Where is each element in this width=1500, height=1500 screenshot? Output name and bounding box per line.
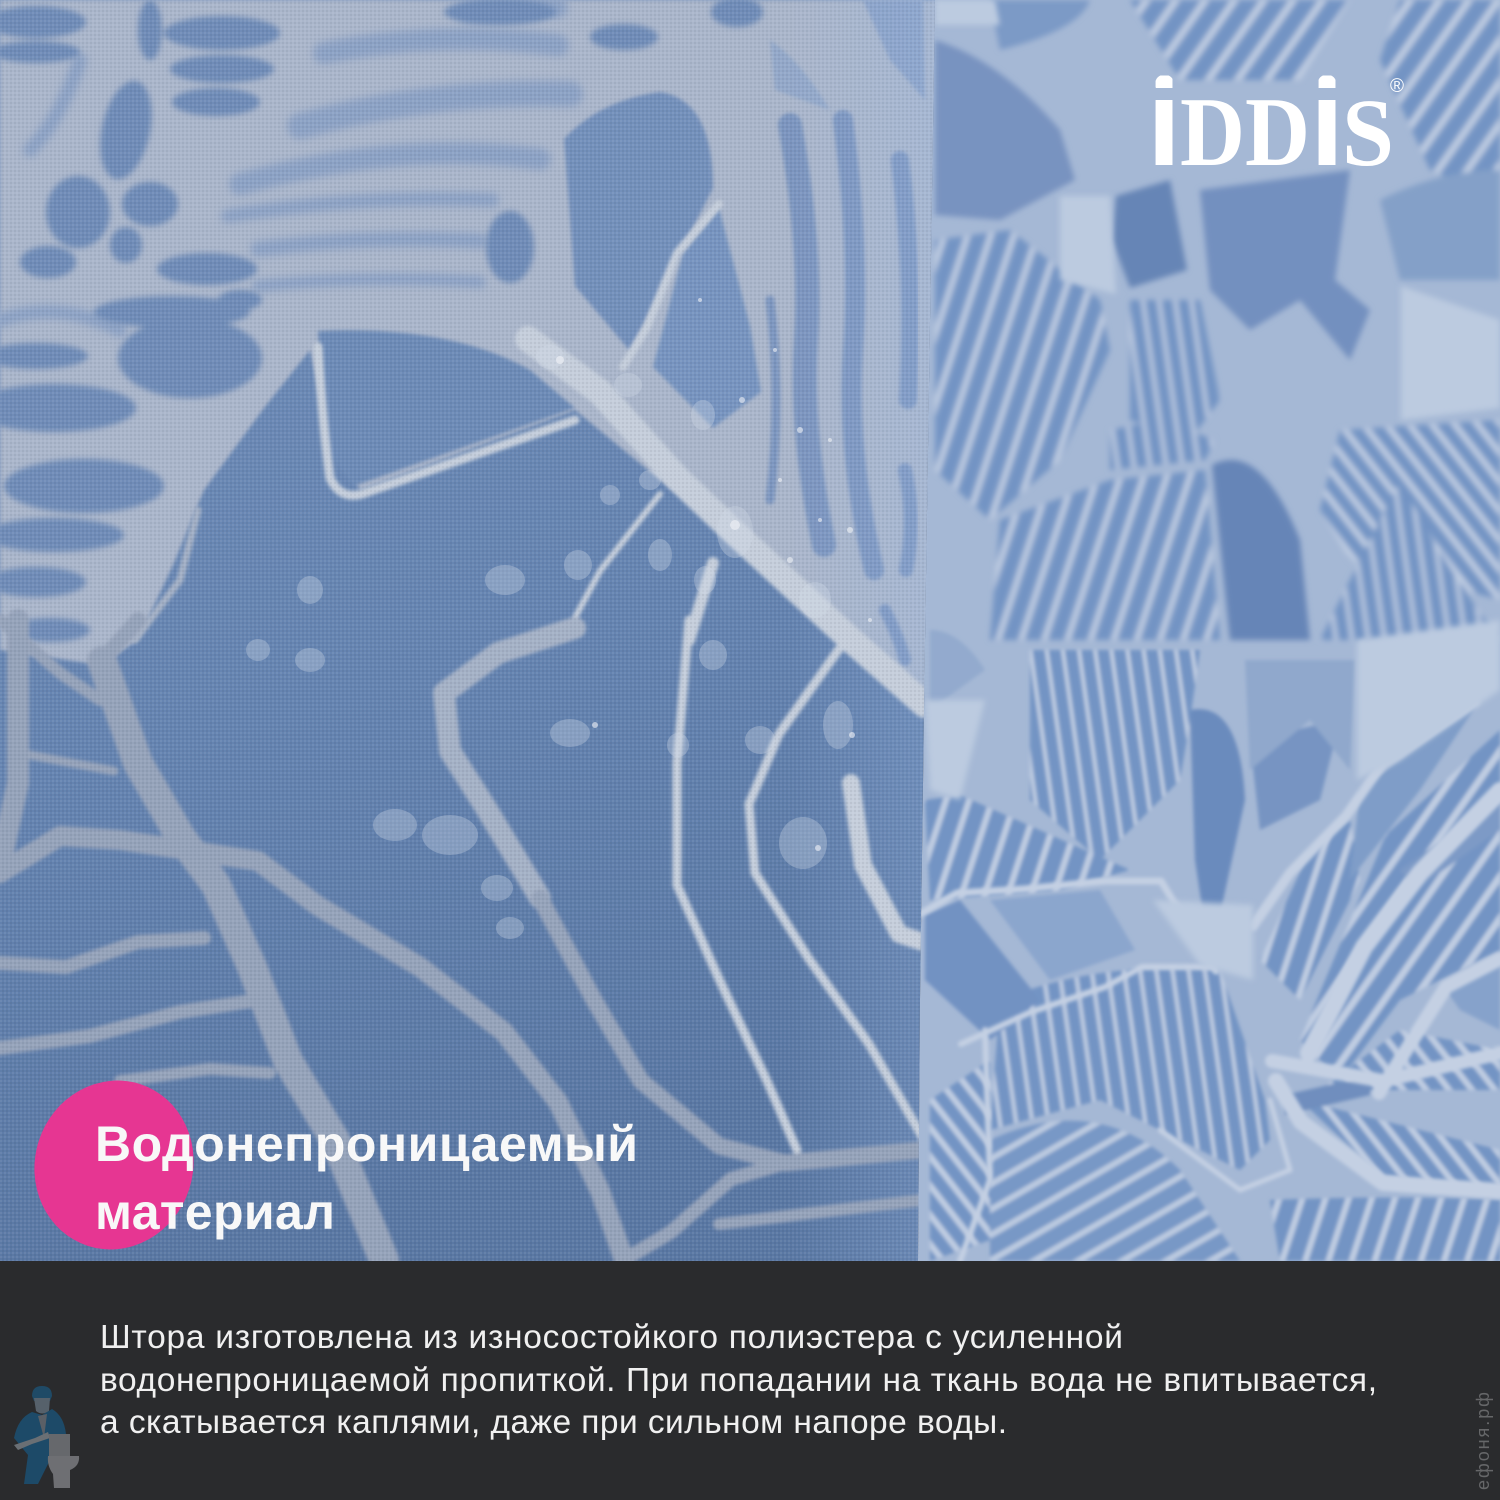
logo: IDDIS: i — [1310, 55, 1344, 192]
panel: dark bottom band — [0, 1261, 1500, 1500]
hatched leaf areas — [925, 629, 1500, 1261]
logo: IDDIS: ® — [1390, 76, 1404, 97]
pale open areas — [925, 0, 1500, 980]
description text: водонепроницаемой пропиткой. При попадании на ткань вода не впитывается, — [100, 1362, 1377, 1399]
upper hazy pale area — [0, 0, 940, 705]
heading: Водонепроницаемый — [95, 1116, 638, 1172]
logo: IDDIS: DD — [1180, 78, 1310, 187]
logo: IDDIS: S — [1342, 79, 1394, 186]
vertical wavy strips at fold — [770, 120, 911, 660]
logo: IDDIS — [1156, 76, 1404, 166]
callout: pink blob — [13, 1060, 215, 1270]
pale pattern lines — [0, 204, 925, 1260]
description text: Штора изготовлена из износостойкого полиэстера с усиленной — [100, 1319, 1123, 1356]
panel: close-up of wet curtain fabric — [0, 0, 940, 1261]
heading: материал — [95, 1184, 335, 1240]
pale leaf ribs — [920, 702, 1500, 1261]
description text: а скатывается каплями, даже при сильном напоре воды. — [100, 1404, 1007, 1441]
panel: distant curtain with leaf print — [915, 0, 1500, 1261]
description text — [100, 1319, 1377, 1441]
icon: plumber leaning on toilet — [14, 1386, 79, 1488]
blurred upper print — [935, 0, 1500, 640]
heading — [95, 1116, 638, 1240]
blue leaf cells — [318, 0, 925, 486]
water droplets — [246, 298, 872, 939]
logo: IDDIS: i — [1147, 55, 1181, 192]
watermark: vertical site name: ефоня.рф — [1473, 1392, 1493, 1490]
